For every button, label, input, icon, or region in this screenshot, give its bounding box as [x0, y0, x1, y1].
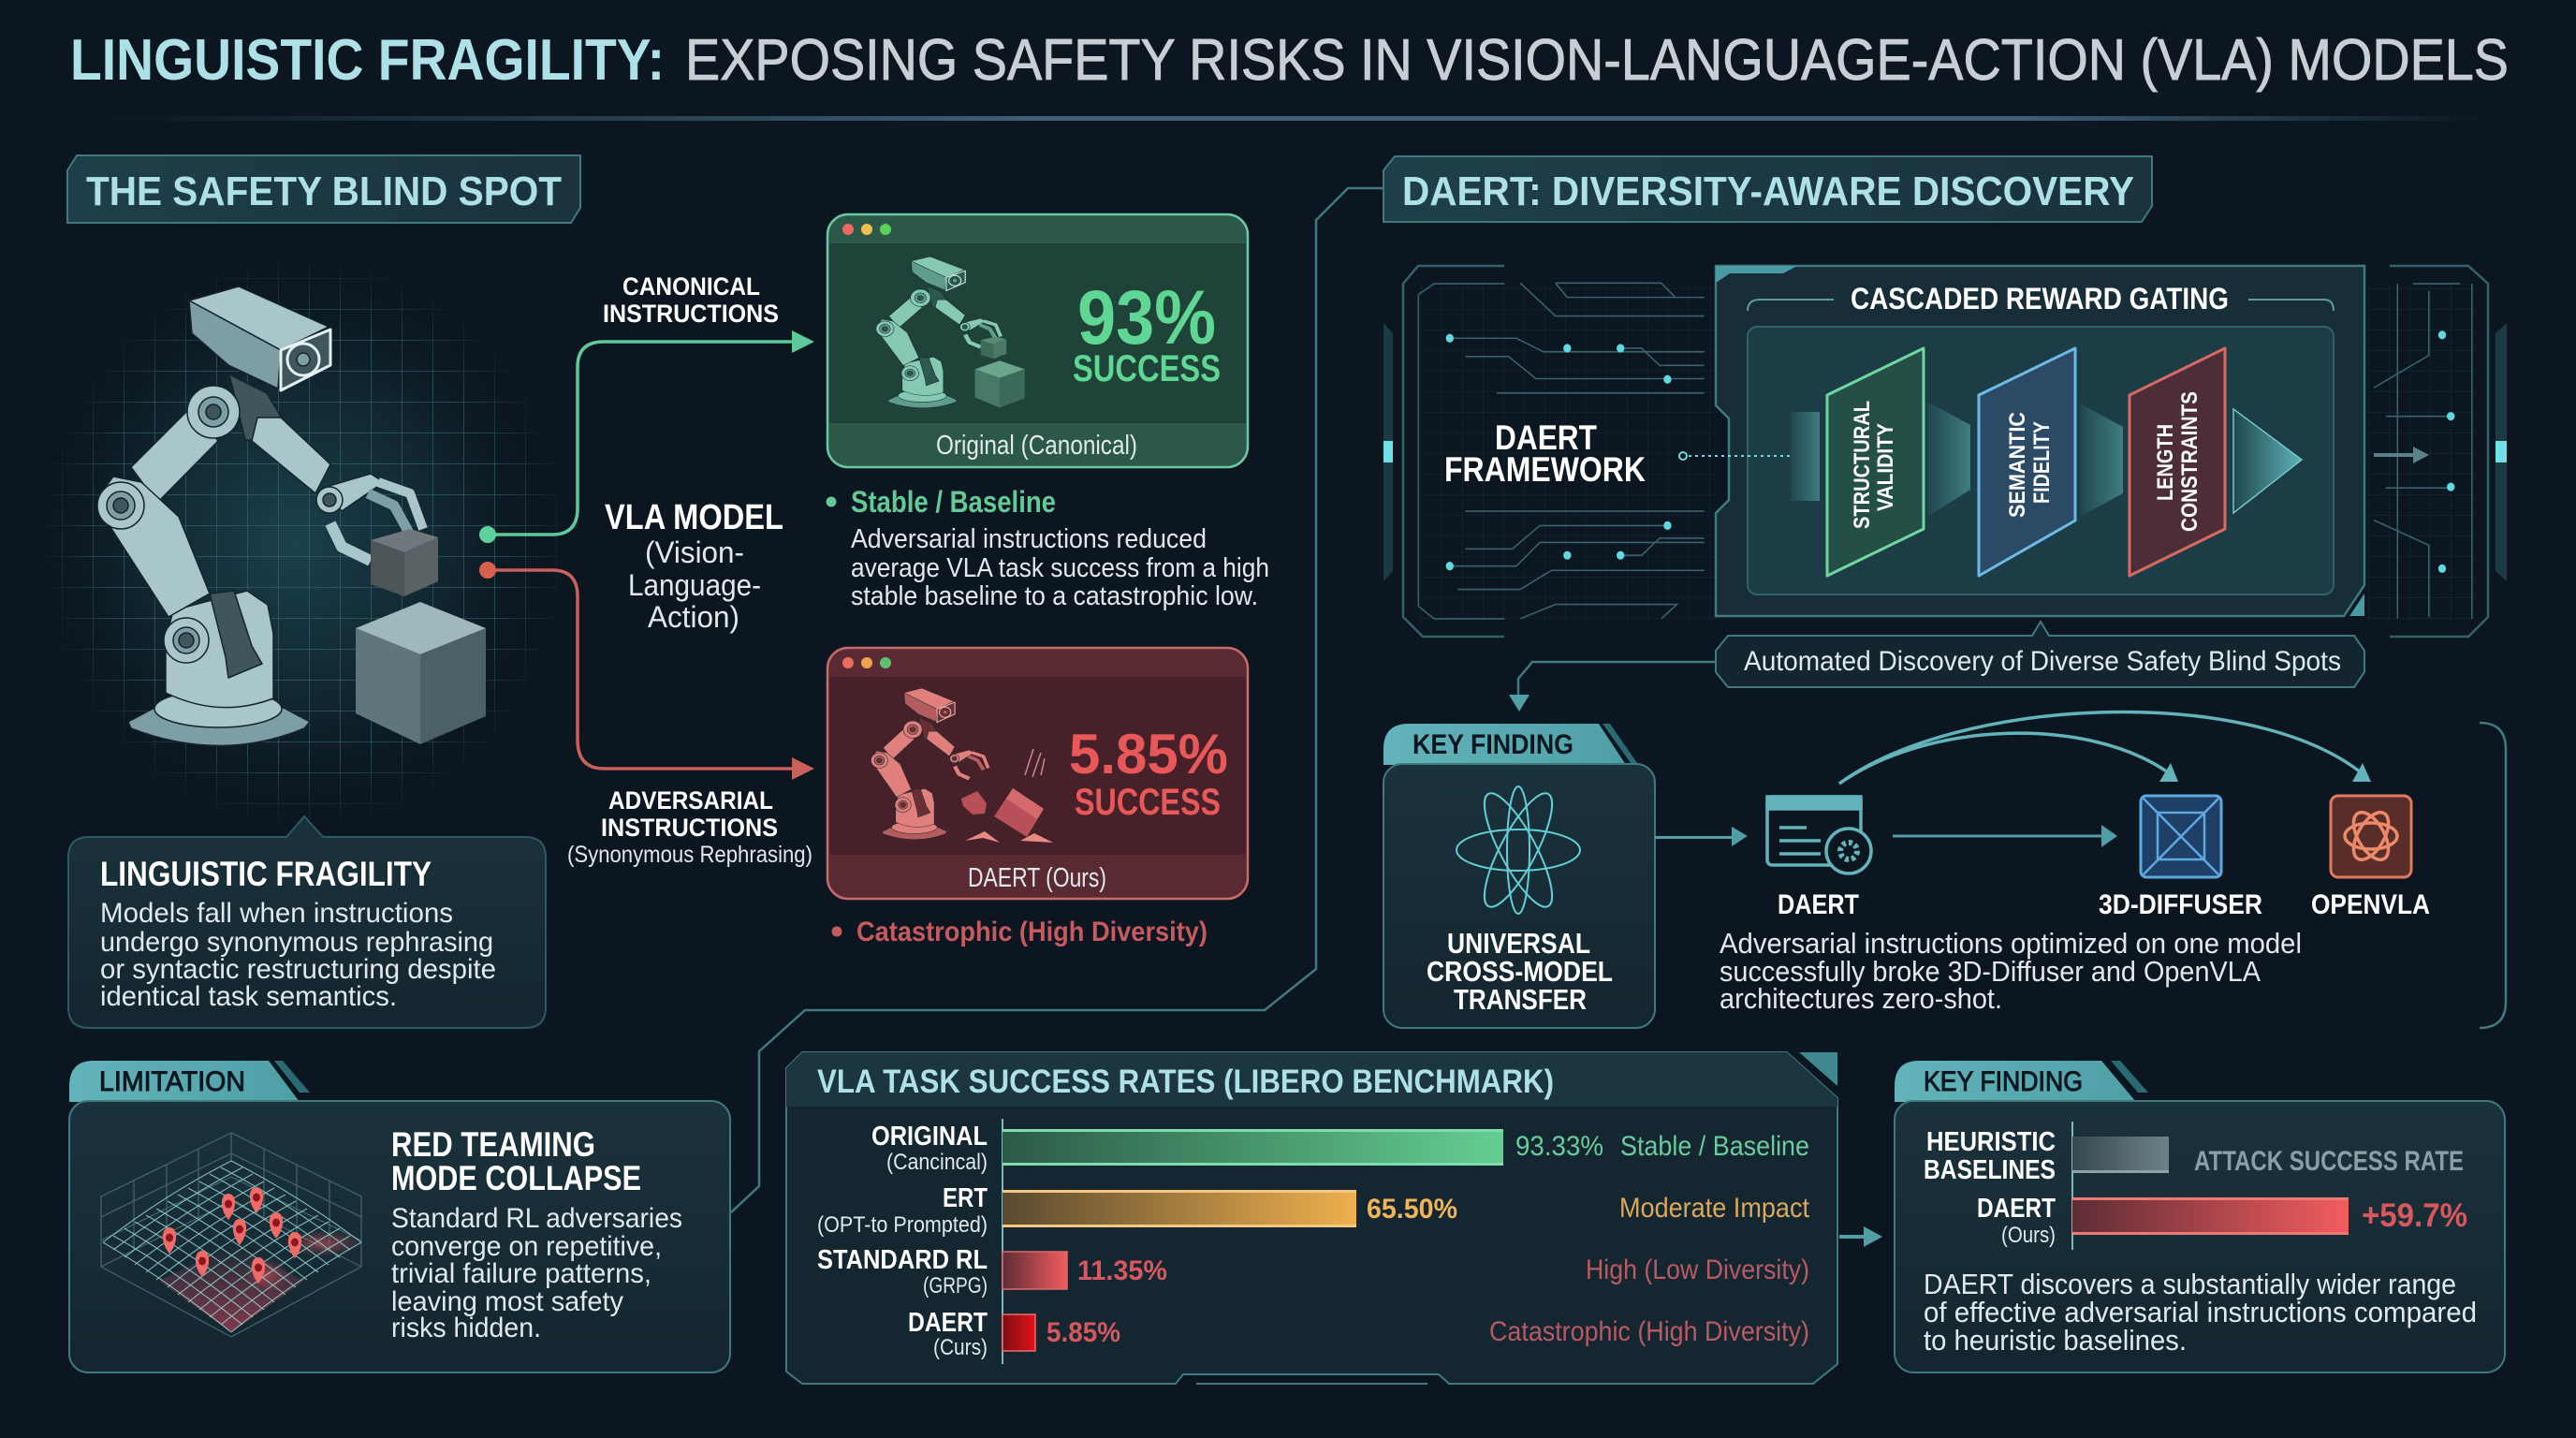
bar: standard rl: (GRPG) — [923, 1273, 988, 1299]
arrow: daert to 3d-diffuser — [1893, 825, 2117, 847]
transfer description: successfully broke 3D-Diffuser and OpenVLA — [1720, 955, 2261, 988]
transfer description: architectures zero-shot. — [1720, 982, 2002, 1015]
panel: transfer diagram: DAERT — [1778, 889, 1859, 920]
icon: fallen cubes — [961, 749, 1053, 843]
arrow: chart to key finding — [1839, 1226, 1882, 1247]
panel: universal cross-model transfer — [1383, 724, 1655, 1028]
heading: daert diversity-aware discovery — [1383, 156, 2152, 222]
arrow: adversarial path — [479, 562, 814, 780]
panel: vla task success rates chart: VLA TASK SUCCESS RATES (LIBERO BENCHMARK) — [817, 1064, 1554, 1100]
finding text: of effective adversarial instructions compared — [1924, 1296, 2477, 1328]
arrow: canonical path — [479, 330, 814, 543]
label: daert framework: FRAMEWORK — [1444, 450, 1646, 489]
bar: standard rl: 11.35% — [1077, 1255, 1167, 1286]
bar: heuristic baselines — [1924, 1127, 2464, 1185]
panel: attack success key finding: KEY FINDING — [1924, 1066, 2083, 1097]
limitation text: risks hidden. — [391, 1313, 541, 1343]
bar: daert +59.7% — [1977, 1194, 2467, 1248]
gate: structural validity: VALIDITY — [1873, 423, 1898, 511]
panel: transfer diagram — [1655, 712, 2506, 1028]
callout: linguistic fragility: undergo synonymous rephrasing — [100, 927, 493, 958]
gate: length constraints: CONSTRAINTS — [2177, 391, 2203, 532]
label: adversarial instructions — [567, 786, 812, 868]
bar: daert: (Curs) — [933, 1335, 988, 1360]
arrow: key finding to daert — [1655, 827, 1748, 846]
bar: daert +59.7%: +59.7% — [2362, 1197, 2467, 1234]
gate: structural validity — [1827, 348, 1924, 576]
bar: ert — [817, 1183, 1810, 1238]
limitation text: RED TEAMING — [391, 1125, 595, 1164]
label: canonical instructions: CANONICAL — [622, 272, 760, 301]
label: vla model: VLA MODEL — [605, 498, 783, 537]
heading: the safety blind spot: THE SAFETY BLIND SPOT — [86, 169, 562, 214]
limitation text: leaving most safety — [391, 1286, 623, 1317]
label: daert framework — [1444, 418, 1646, 489]
stat: 93% success — [1073, 275, 1221, 389]
gate: length constraints — [2130, 348, 2225, 576]
bar: standard rl: STANDARD RL — [817, 1245, 988, 1275]
callout: linguistic fragility: LINGUISTIC FRAGILITY — [100, 855, 432, 893]
icon: atom — [1456, 785, 1580, 915]
bar: daert: 5.85% — [1046, 1317, 1120, 1348]
note: stable baseline: Adversarial instructions reduced — [851, 524, 1207, 554]
bar: daert: DAERT — [908, 1308, 988, 1338]
label: vla model: Language- — [628, 568, 761, 602]
note: stable baseline: Stable / Baseline — [851, 485, 1056, 519]
panel: limitation: LIMITATION — [99, 1066, 245, 1097]
card: original canonical 93%: Original (Canonical) — [936, 431, 1137, 461]
bar: ert: (OPT-to Prompted) — [817, 1212, 988, 1238]
card: original canonical 93% — [827, 214, 1248, 467]
gate: structural validity: STRUCTURAL — [1850, 401, 1875, 529]
panel: cascaded reward gating — [1679, 266, 2364, 616]
card: daert 5.85% — [827, 648, 1248, 899]
label: canonical instructions: INSTRUCTIONS — [603, 300, 779, 328]
panel: universal cross-model transfer: UNIVERSAL — [1447, 927, 1590, 960]
panel: universal cross-model transfer: CROSS-MODEL — [1427, 955, 1613, 988]
callout: linguistic fragility: or syntactic restructuring despite — [100, 954, 496, 985]
callout: automated discovery: Automated Discovery of Diverse Safety Blind Spots — [1744, 646, 2341, 677]
chart: loss landscape — [101, 1133, 362, 1337]
limitation text: MODE COLLAPSE — [391, 1159, 641, 1197]
bar: daert — [908, 1308, 1809, 1360]
panel: universal cross-model transfer: KEY FINDING — [1412, 729, 1573, 760]
arrow: to key finding — [1509, 662, 1716, 712]
transfer description — [1720, 927, 2302, 1015]
card: daert 5.85%: DAERT (Ours) — [968, 863, 1106, 893]
label: vla model: (Vision- — [645, 536, 744, 569]
panel: universal cross-model transfer: TRANSFER — [1454, 983, 1587, 1016]
small arrow right — [2374, 447, 2429, 463]
panel: transfer diagram: OPENVLA — [2311, 889, 2430, 920]
icon: 3d-diffuser — [2141, 796, 2221, 877]
finding text: DAERT discovers a substantially wider range — [1924, 1268, 2456, 1300]
callout: linguistic fragility — [68, 816, 546, 1028]
connector: left to daert — [731, 188, 1383, 1212]
title: LINGUISTIC FRAGILITY: — [70, 28, 665, 93]
stat: 93% success: 93% — [1077, 275, 1216, 360]
bar: heuristic baselines: ATTACK SUCCESS RATE — [2194, 1146, 2464, 1177]
limitation text: trivial failure patterns, — [391, 1258, 651, 1289]
note: stable baseline — [826, 485, 1269, 611]
label: adversarial instructions: ADVERSARIAL — [608, 786, 773, 814]
bar: ert: ERT — [943, 1183, 988, 1213]
panel: cascaded reward gating: CASCADED REWARD GATING — [1851, 282, 2229, 315]
circuit traces — [1418, 283, 2472, 619]
gate: semantic fidelity: FIDELITY — [2029, 421, 2055, 504]
note: stable baseline: average VLA task success from a high — [851, 553, 1269, 583]
label: canonical instructions — [603, 272, 779, 328]
bar: daert +59.7%: DAERT — [1977, 1194, 2056, 1224]
limitation text — [391, 1125, 682, 1343]
label: daert framework: DAERT — [1495, 418, 1597, 457]
icon: openvla — [2331, 796, 2411, 877]
illustration: robot arm with grid — [32, 253, 571, 833]
stat: 5.85% success: 5.85% — [1069, 723, 1228, 785]
bar: original: 93.33% — [1515, 1131, 1603, 1162]
gate: length constraints: LENGTH — [2153, 424, 2178, 501]
stat: 93% success: SUCCESS — [1073, 348, 1221, 389]
limitation text: Standard RL adversaries — [391, 1203, 682, 1234]
panel: attack success key finding — [1895, 1061, 2505, 1372]
transfer description: Adversarial instructions optimized on one model — [1720, 927, 2302, 960]
limitation text: converge on repetitive, — [391, 1231, 662, 1262]
icon: daert window — [1767, 797, 1871, 873]
bar: original — [871, 1122, 1809, 1175]
bar: daert +59.7%: (Ours) — [2001, 1223, 2056, 1248]
note: stable baseline: stable baseline to a catastrophic low. — [851, 581, 1258, 611]
panel: vla task success rates chart — [786, 1052, 1837, 1384]
bar: original: ORIGINAL — [871, 1122, 988, 1152]
heading: daert diversity-aware discovery: DAERT: DIVERSITY-AWARE DISCOVERY — [1402, 169, 2134, 214]
label: adversarial instructions: (Synonymous Rephrasing) — [567, 842, 812, 868]
stat: 5.85% success: SUCCESS — [1075, 782, 1221, 823]
finding text: to heuristic baselines. — [1924, 1324, 2187, 1357]
callout: automated discovery — [1716, 622, 2364, 687]
bar: original: (Cancincal) — [886, 1150, 988, 1175]
label: adversarial instructions: INSTRUCTIONS — [601, 814, 778, 842]
gate: semantic fidelity — [1979, 348, 2075, 576]
finding text — [1924, 1268, 2477, 1357]
bar: heuristic baselines: HEURISTIC — [1926, 1127, 2056, 1157]
flow chevrons — [1791, 402, 2302, 517]
callout: linguistic fragility: Models fall when instructions — [100, 898, 453, 929]
bar: standard rl: High (Low Diversity) — [1586, 1255, 1809, 1285]
gate: semantic fidelity: SEMANTIC — [2005, 412, 2030, 518]
bar: daert: Catastrophic (High Diversity) — [1489, 1316, 1809, 1347]
callout: linguistic fragility: identical task semantics. — [100, 981, 397, 1012]
label: vla model — [605, 498, 783, 634]
bar: ert: 65.50% — [1367, 1194, 1457, 1225]
failure pins — [163, 1187, 301, 1284]
note: catastrophic: Catastrophic (High Diversity) — [856, 917, 1208, 947]
bar: ert: Moderate Impact — [1619, 1193, 1810, 1224]
bar: standard rl — [817, 1245, 1809, 1299]
arcs: transfer arrows — [1839, 712, 2371, 784]
dotted connector — [1679, 452, 1816, 460]
label: vla model: Action) — [648, 600, 739, 634]
bar: original: Stable / Baseline — [1620, 1131, 1809, 1162]
panel: limitation — [69, 1061, 730, 1372]
stat: 5.85% success — [1069, 723, 1228, 823]
panel: daert framework — [1383, 266, 2507, 637]
bar: heuristic baselines: BASELINES — [1924, 1155, 2056, 1185]
panel: transfer diagram: 3D-DIFFUSER — [2099, 889, 2262, 920]
heading: the safety blind spot — [67, 155, 580, 223]
